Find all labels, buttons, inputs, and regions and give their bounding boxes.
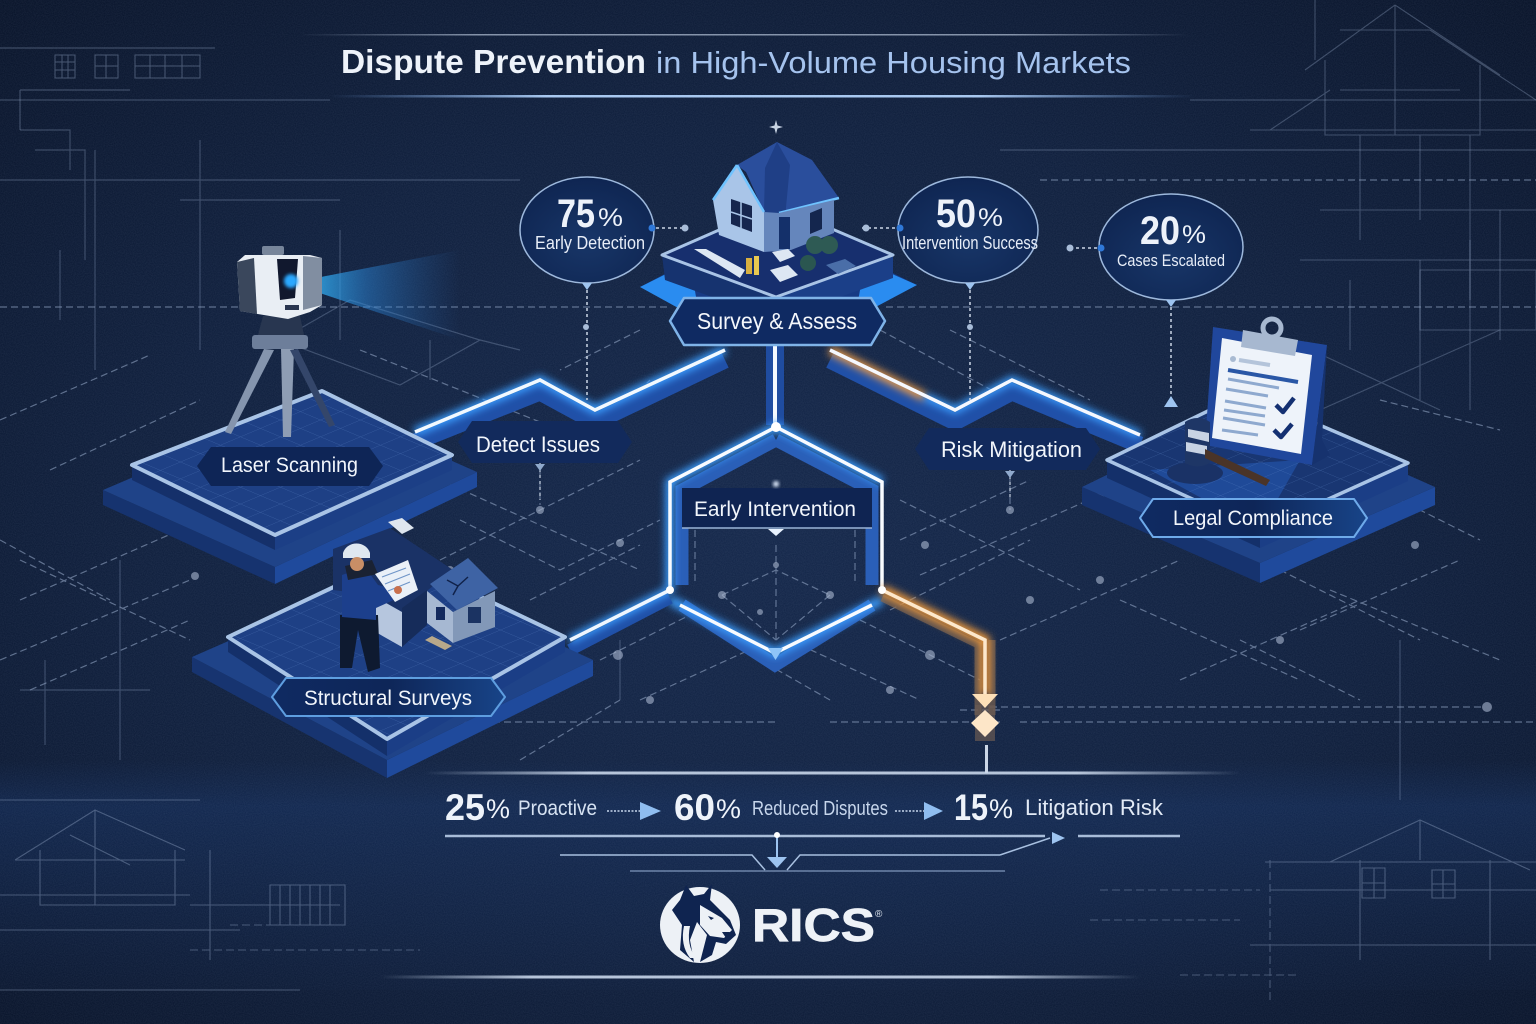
blueprint nodes xyxy=(191,493,1492,712)
connector: left tube xyxy=(415,350,725,442)
funnel arrows to logo xyxy=(445,832,1180,871)
logo: wordmark: RICS xyxy=(752,899,875,951)
stat bubble: 20% Cases Escalated: Cases Escalated xyxy=(1117,251,1225,270)
footer line xyxy=(380,976,1140,978)
icon: clipboard xyxy=(1205,319,1330,465)
connector: right tube xyxy=(830,350,1140,445)
outcome: 25% Proactive: Proactive xyxy=(518,797,597,820)
logo: lion emblem xyxy=(660,884,740,963)
stat bubble: 50% Intervention Success xyxy=(862,177,1038,400)
logo: registered mark: ® xyxy=(875,909,883,920)
platform: Structural Surveys xyxy=(192,518,593,778)
stat bubble: 20% Cases Escalated: 20 xyxy=(1140,209,1180,253)
platform deck xyxy=(1107,393,1408,548)
title: main: Dispute Prevention xyxy=(341,43,646,80)
label: Structural Surveys: Structural Surveys xyxy=(304,687,472,710)
platform: Survey & Assess xyxy=(640,142,917,345)
label: Detect Issues: Detect Issues xyxy=(476,432,600,457)
label: Survey & Assess xyxy=(670,298,885,345)
stat bubble: 75% Early Detection: 75 xyxy=(557,192,595,236)
bottom-left blueprint house xyxy=(0,810,420,990)
arrow xyxy=(895,802,943,820)
stat bubble: 50% Intervention Success: % xyxy=(978,204,1003,232)
label: Legal Compliance: Legal Compliance xyxy=(1173,507,1333,530)
platform: Legal Compliance xyxy=(1082,319,1435,583)
label: Legal Compliance xyxy=(1140,499,1367,537)
outcome: 25% Proactive xyxy=(445,787,597,828)
diamonds: decision markers xyxy=(971,694,999,773)
label: Early Intervention xyxy=(682,481,872,536)
stat bubble: 75% Early Detection xyxy=(520,177,688,400)
outcome: 15% Litigation Risk: % xyxy=(989,794,1013,824)
platform deck xyxy=(662,205,893,320)
stat bubble: 75% Early Detection: % xyxy=(598,204,623,232)
icon: surveyor xyxy=(340,543,418,672)
outcome: 60% Reduced Disputes xyxy=(674,787,888,828)
stat bubble: 50% Intervention Success: Intervention Success xyxy=(902,233,1038,253)
label: Risk Mitigation xyxy=(915,428,1100,500)
platform deck xyxy=(132,391,452,550)
bottom-right blueprint house xyxy=(1090,820,1536,1000)
platform base xyxy=(192,657,387,778)
arrow xyxy=(607,802,661,820)
title: sub: in High-Volume Housing Markets xyxy=(656,45,1131,80)
label: Laser Scanning xyxy=(197,447,383,486)
connector network xyxy=(415,345,1140,715)
outcome: 15% Litigation Risk xyxy=(954,787,1164,828)
connector: centre stem xyxy=(766,345,784,425)
top-left blueprint windows xyxy=(0,48,215,130)
icon: laser scanner xyxy=(237,246,460,340)
outcome: 60% Reduced Disputes: 60 xyxy=(674,787,715,828)
label: Risk Mitigation: Risk Mitigation xyxy=(941,437,1082,462)
stat bubble: 20% Cases Escalated: % xyxy=(1182,221,1206,249)
platform: Laser Scanning xyxy=(103,246,477,584)
platform deck xyxy=(228,557,565,756)
stat bubble: 20% Cases Escalated xyxy=(1066,194,1243,407)
platform base xyxy=(103,490,275,584)
outcome: 60% Reduced Disputes: % xyxy=(716,794,741,824)
outcome: 25% Proactive: % xyxy=(486,794,510,824)
icon: gavel xyxy=(1167,418,1270,486)
outcome: 25% Proactive: 25 xyxy=(445,787,485,828)
outcome: 15% Litigation Risk: Litigation Risk xyxy=(1025,795,1164,820)
label: Early Intervention: Early Intervention xyxy=(694,498,856,521)
label: Structural Surveys xyxy=(272,678,505,716)
platform base xyxy=(1082,487,1260,583)
top-right blueprint house xyxy=(1250,0,1536,350)
connector: to structural surveys xyxy=(570,590,670,650)
outcome flow row xyxy=(425,772,1240,828)
label: Survey & Assess: Survey & Assess xyxy=(697,308,857,334)
glow base xyxy=(640,215,917,345)
connector: hexagon xyxy=(670,427,882,665)
stat bubble: 75% Early Detection: Early Detection xyxy=(535,233,645,253)
stat bubble: 50% Intervention Success: 50 xyxy=(936,192,976,236)
title xyxy=(300,34,1195,98)
icon: tripod xyxy=(225,316,335,437)
connector: orange path xyxy=(882,590,992,715)
label: Laser Scanning: Laser Scanning xyxy=(221,454,358,477)
hexagon node marker xyxy=(666,422,886,660)
icon: cracked house xyxy=(333,518,498,650)
icon: house xyxy=(694,142,856,282)
sparkle xyxy=(769,120,783,134)
outcome: 60% Reduced Disputes: Reduced Disputes xyxy=(752,798,888,820)
outcome: 15% Litigation Risk: 15 xyxy=(954,787,988,828)
label: Detect Issues xyxy=(458,421,632,500)
RICS logo xyxy=(660,884,883,963)
